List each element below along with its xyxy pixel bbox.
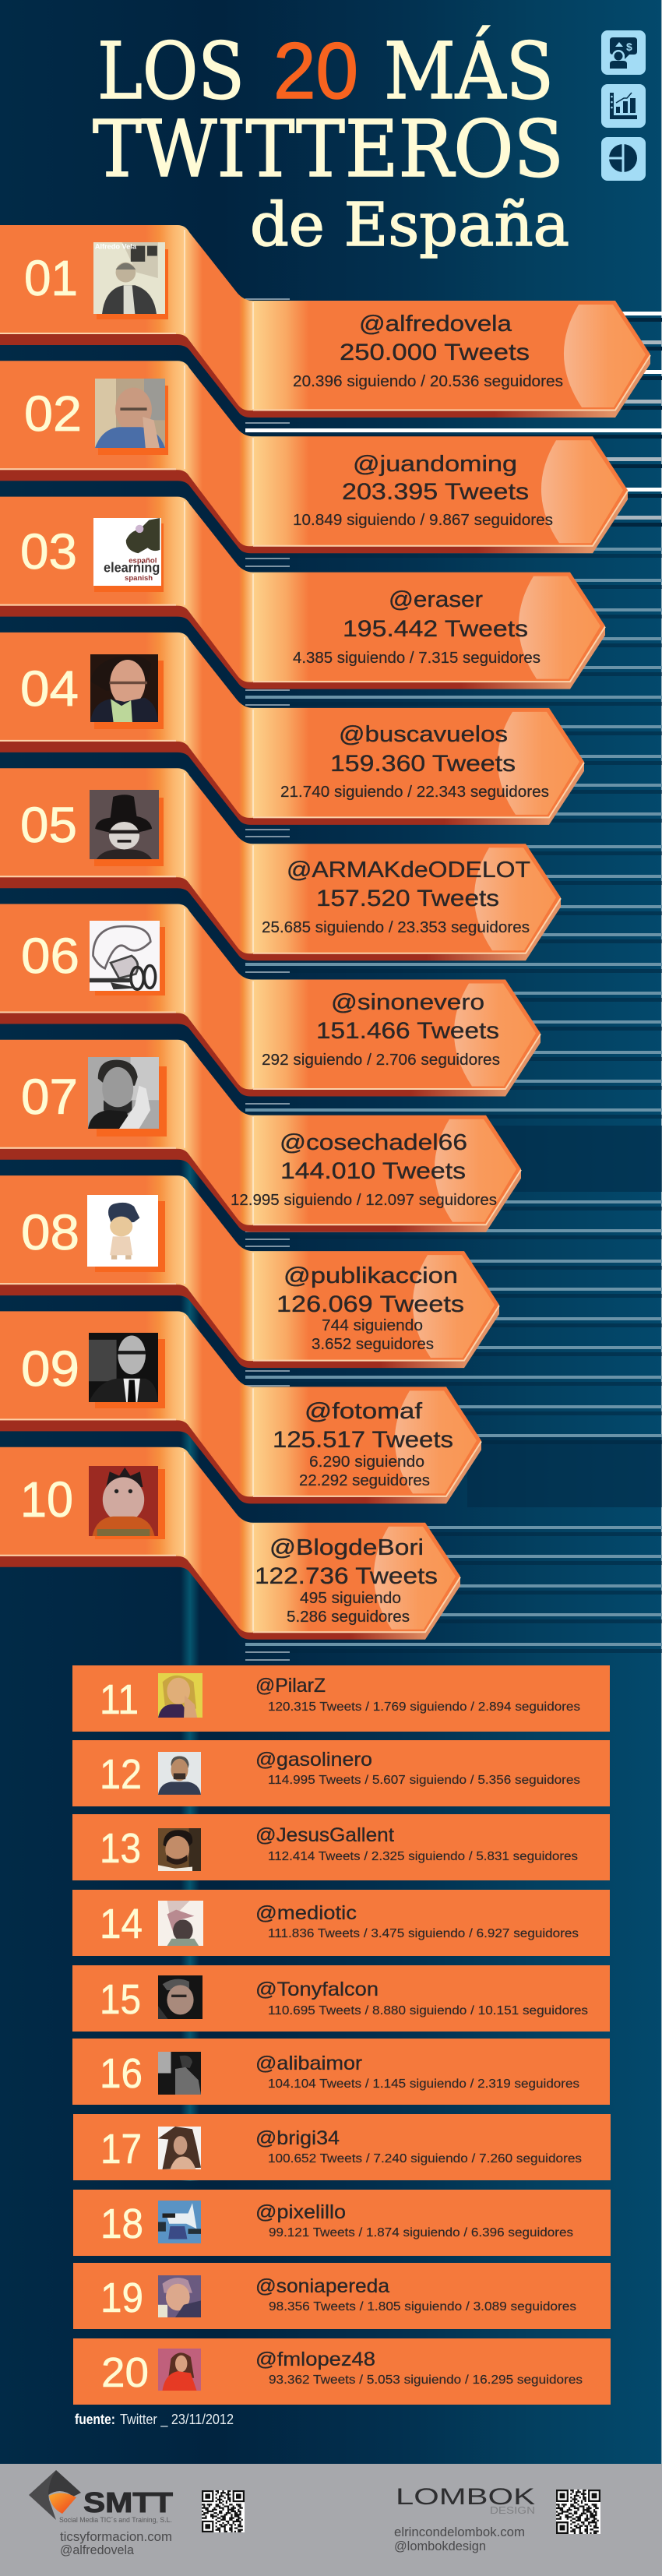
QR code: Lombok <box>556 2490 600 2534</box>
card 18: 18 <box>100 2201 143 2247</box>
card 19 <box>73 2263 611 2329</box>
photo 13 <box>158 1828 201 1871</box>
stats 07: 144.010 Tweets <box>280 1158 466 1184</box>
photo 09 <box>89 1333 165 1408</box>
photo 17 <box>158 2127 201 2169</box>
rank 01: 01 <box>24 250 78 306</box>
card 11: @PilarZ <box>255 1675 326 1697</box>
card 12: 12 <box>100 1751 142 1798</box>
row 07 <box>0 1040 521 1232</box>
card 17: 17 <box>100 2126 142 2173</box>
stats 08: @publikaccion <box>283 1263 458 1288</box>
contact: Lombok <box>394 2525 525 2553</box>
photo 08 <box>87 1195 165 1272</box>
contact: SMTT <box>60 2529 172 2557</box>
card 17: 100.652 Tweets / 7.240 siguiendo / 7.260 seguidores <box>268 2152 582 2165</box>
row 02 <box>0 361 628 553</box>
stats 03: 4.385 siguiendo / 7.315 seguidores <box>293 650 541 667</box>
title line 1: MÁS <box>384 26 554 117</box>
rank 05: 05 <box>20 797 77 853</box>
source note <box>75 2412 234 2428</box>
card 11 <box>72 1665 610 1732</box>
card 16: @alibaimor <box>255 2053 362 2074</box>
stats 04: 159.360 Tweets <box>330 751 516 777</box>
row 09 <box>0 1311 481 1503</box>
stats 01: 20.396 siguiendo / 20.536 seguidores <box>293 373 563 390</box>
logo: SMTT <box>29 2470 173 2525</box>
photo 02 <box>95 379 168 455</box>
title line 1: LOS <box>97 26 245 117</box>
title <box>93 26 569 260</box>
photo 15 <box>158 1975 202 2019</box>
footer panel <box>0 2464 662 2576</box>
card 14: 111.836 Tweets / 3.475 siguiendo / 6.927 seguidores <box>268 1927 579 1940</box>
rank 09: 09 <box>21 1341 79 1397</box>
card 13: @JesusGallent <box>255 1824 394 1846</box>
row 05 <box>0 768 561 960</box>
stats 03: @eraser <box>389 587 483 612</box>
title line 1: 20 <box>273 26 358 115</box>
stats 09 <box>273 1399 453 1489</box>
logo: Lombok: DESIGN <box>490 2504 535 2516</box>
photo 04 <box>90 654 164 729</box>
logo: SMTT: Social Media TIC´s and Training, S.L. <box>59 2516 172 2525</box>
ribbon 02 <box>0 361 628 553</box>
photo 06 <box>90 921 165 996</box>
stats 09: 22.292 seguidores <box>299 1472 430 1489</box>
stats 06: 151.466 Tweets <box>316 1018 499 1044</box>
photo 20 <box>158 2349 201 2391</box>
logo: Lombok: LOMBOK <box>396 2484 535 2510</box>
card 19: 98.356 Tweets / 1.805 siguiendo / 3.089 seguidores <box>269 2300 576 2313</box>
rank 03: 03 <box>20 523 77 580</box>
stats 05: @ARMAKdeODELOT <box>287 858 530 883</box>
photo 05 <box>90 790 164 866</box>
card 16: 104.104 Tweets / 1.145 siguiendo / 2.319 seguidores <box>268 2077 579 2091</box>
card 13: 13 <box>100 1825 141 1872</box>
photo 03 <box>93 518 164 592</box>
contact: SMTT: ticsyformacion.com <box>60 2529 172 2544</box>
photo 14 <box>158 1901 203 1946</box>
icon: speech bubble person: $ <box>626 41 632 53</box>
stats 01 <box>293 312 563 390</box>
contact: Lombok: elrincondelombok.com <box>394 2525 525 2539</box>
card 15: 15 <box>100 1976 141 2023</box>
icon: speech bubble person <box>601 30 646 75</box>
card 20 <box>73 2338 611 2405</box>
card 12: 114.995 Tweets / 5.607 siguiendo / 5.356 seguidores <box>268 1774 580 1787</box>
card 16: 16 <box>100 2050 143 2097</box>
stats 06 <box>262 990 500 1069</box>
ribbon 09 <box>0 1311 481 1503</box>
stats 05: 25.685 siguiendo / 23.353 seguidores <box>262 919 530 936</box>
contact: SMTT: @alfredovela <box>60 2543 135 2557</box>
stats 10: 122.736 Tweets <box>255 1563 438 1589</box>
row 10 <box>0 1447 460 1640</box>
card 20: 20 <box>101 2349 149 2396</box>
stats 10 <box>255 1535 438 1626</box>
QR code: SMTT <box>202 2490 245 2532</box>
card 13: 112.414 Tweets / 2.325 siguiendo / 5.831 seguidores <box>268 1850 578 1863</box>
stats 04: @buscavuelos <box>339 722 508 747</box>
icon: pie chart <box>601 137 646 181</box>
rank 06: 06 <box>21 928 79 984</box>
row 06 <box>0 904 541 1097</box>
card 14: @mediotic <box>255 1902 357 1924</box>
stats 02 <box>293 452 553 529</box>
photo 18 <box>158 2201 201 2243</box>
rank 04: 04 <box>20 661 79 717</box>
stats 10: 5.286 seguidores <box>287 1609 410 1626</box>
card 11: 120.315 Tweets / 1.769 siguiendo / 2.894 seguidores <box>268 1700 580 1714</box>
photo 07 <box>88 1057 167 1136</box>
stats 10: @BlogdeBori <box>269 1535 424 1560</box>
row 08 <box>0 1175 499 1368</box>
card 19: 19 <box>100 2275 143 2321</box>
source note: Twitter _ 23/11/2012 <box>120 2412 234 2428</box>
stats 01: 250.000 Tweets <box>340 340 530 365</box>
stats 04: 21.740 siguiendo / 22.343 seguidores <box>280 784 549 801</box>
stats 01: @alfredovela <box>359 312 512 337</box>
ribbon 01 <box>0 225 650 418</box>
stats 08: 126.069 Tweets <box>276 1292 464 1317</box>
card 17: @brigi34 <box>255 2127 340 2149</box>
ribbon 10 <box>0 1447 460 1640</box>
stats 10: 495 siguiendo <box>300 1590 401 1607</box>
row 03 <box>0 497 605 689</box>
ribbon 04 <box>0 633 584 825</box>
photo 12 <box>158 1752 201 1795</box>
stats 07: 12.995 siguiendo / 12.097 seguidores <box>231 1192 497 1209</box>
stats 02: 10.849 siguiendo / 9.867 seguidores <box>293 512 553 529</box>
photo 11 <box>158 1673 202 1718</box>
photo 03: español <box>129 556 157 565</box>
card 19: @soniapereda <box>255 2275 389 2297</box>
rank 08: 08 <box>21 1204 79 1260</box>
card 14: 14 <box>100 1901 143 1947</box>
ribbon 06 <box>0 904 541 1097</box>
card 16 <box>72 2039 610 2105</box>
stats 09: 6.290 siguiendo <box>309 1454 424 1471</box>
card 18: @pixelillo <box>255 2201 346 2223</box>
stats 06: @sinonevero <box>331 990 484 1015</box>
stats 06: 292 siguiendo / 2.706 seguidores <box>262 1052 500 1069</box>
card 13 <box>72 1814 610 1880</box>
card 18 <box>73 2190 611 2256</box>
ribbon 08 <box>0 1175 499 1368</box>
rank 10: 10 <box>20 1471 73 1528</box>
source note: fuente: <box>75 2412 115 2427</box>
photo 10 <box>89 1466 165 1539</box>
row 04 <box>0 633 584 825</box>
ribbon 03 <box>0 497 605 689</box>
stats 09: @fotomaf <box>305 1399 423 1424</box>
ribbon 05 <box>0 768 561 960</box>
card 18: 99.121 Tweets / 1.874 siguiendo / 6.396 seguidores <box>269 2226 573 2239</box>
stats 04 <box>280 722 549 801</box>
title line 3: de España <box>250 191 569 260</box>
stats 07 <box>231 1130 497 1209</box>
stats 08 <box>276 1263 464 1353</box>
stats 02: @juandoming <box>353 452 517 477</box>
card 12: @gasolinero <box>255 1749 372 1771</box>
rank 02: 02 <box>24 386 82 442</box>
card 15: 110.695 Tweets / 8.880 siguiendo / 10.151 seguidores <box>268 2004 588 2017</box>
stats 05 <box>262 858 530 936</box>
photo 16 <box>158 2052 201 2095</box>
stats 03 <box>293 587 541 667</box>
photo 01: Alfredo Vela <box>95 242 137 250</box>
card 20: @fmlopez48 <box>255 2349 375 2370</box>
title line 2: TWITTEROS <box>93 104 564 195</box>
logo: SMTT: SMTT <box>83 2486 173 2518</box>
card 14 <box>72 1890 610 1956</box>
stats 09: 125.517 Tweets <box>273 1427 453 1453</box>
row 01 <box>0 225 650 418</box>
card 12 <box>72 1740 610 1806</box>
card 17 <box>73 2114 611 2180</box>
stats 03: 195.442 Tweets <box>343 616 528 642</box>
stats 05: 157.520 Tweets <box>316 886 499 911</box>
card 11: 11 <box>100 1676 139 1723</box>
card 20: 93.362 Tweets / 5.053 siguiendo / 16.295 seguidores <box>269 2373 583 2387</box>
photo 19 <box>158 2275 201 2317</box>
rank 07: 07 <box>21 1069 78 1125</box>
logo: Lombok <box>396 2484 535 2516</box>
icon: bar chart <box>601 84 646 128</box>
stats 08: 3.652 seguidores <box>312 1336 434 1353</box>
title line 1 <box>97 26 554 117</box>
photo 01 <box>93 242 168 319</box>
stats 02: 203.395 Tweets <box>342 479 529 505</box>
stats 08: 744 siguiendo <box>322 1317 423 1334</box>
contact: Lombok: @lombokdesign <box>394 2539 486 2553</box>
stats 07: @cosechadel66 <box>280 1130 467 1155</box>
card 15: @Tonyfalcon <box>255 1979 379 2000</box>
ribbon 07 <box>0 1040 521 1232</box>
card 15 <box>72 1965 610 2032</box>
photo 03: spanish <box>125 574 153 583</box>
